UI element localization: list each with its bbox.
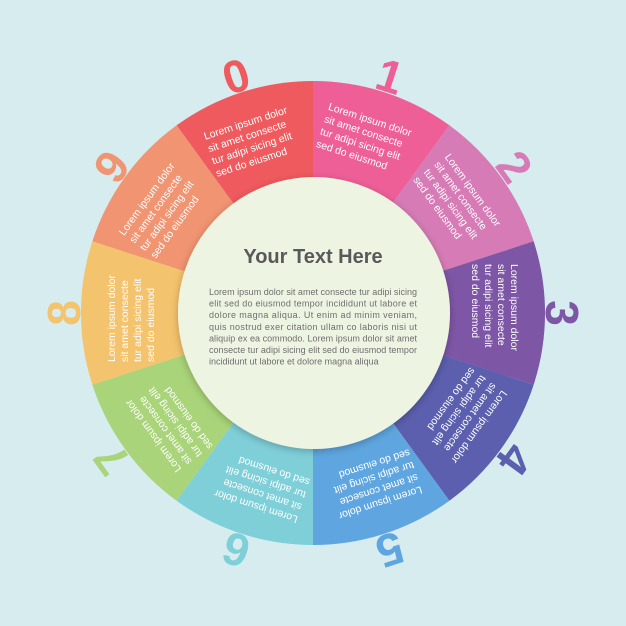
center paragraph: elit sed do eiusmod tempor incididunt ut labore et xyxy=(209,299,417,309)
segment texts: tur adipi sicing elit xyxy=(224,463,307,500)
segment texts: sit amet consecte xyxy=(431,159,489,233)
segment texts: sit amet consecte xyxy=(338,471,420,508)
center paragraph xyxy=(209,287,417,367)
segment texts: tur adipi sicing elit xyxy=(319,126,402,163)
segment texts: sed do eiusmod xyxy=(424,365,478,432)
segment texts: Lorem ipsum dolor xyxy=(508,264,520,351)
segment texts: sit amet consecte xyxy=(441,380,499,454)
center paragraph: quis nostrud exer citation ullam co laboris nisi ut xyxy=(209,322,417,332)
segment texts: sit amet consecte xyxy=(127,172,185,246)
segment texts: sit amet consecte xyxy=(222,476,303,513)
segment texts: sed do eiusmod xyxy=(214,145,289,180)
segment texts: tur adipi sicing elit xyxy=(146,384,205,459)
segment texts: sit amet consecte xyxy=(206,118,288,155)
number digits: 9 xyxy=(83,141,140,192)
number digits: 0 xyxy=(216,48,256,105)
segment texts: sed do eiusmod xyxy=(315,138,389,172)
segment texts: tur adipi sicing elit xyxy=(429,373,488,447)
segment texts: Lorem ipsum dolor xyxy=(106,275,118,362)
segment texts: sed do eiusmod xyxy=(410,175,464,242)
segment texts: sed do eiusmod xyxy=(237,454,311,488)
segment texts: Lorem ipsum dolor xyxy=(123,397,184,474)
segment texts: sit amet consecte xyxy=(119,280,131,362)
segment texts xyxy=(106,101,520,525)
segment texts: Lorem ipsum dolor xyxy=(117,160,178,238)
segment texts: tur adipi sicing elit xyxy=(210,130,294,167)
number digits: 4 xyxy=(486,434,543,485)
number digits xyxy=(38,48,588,578)
center title: Your Text Here xyxy=(243,246,383,268)
segment texts: tur adipi sicing elit xyxy=(332,459,416,496)
segment texts: sed do eiusmod xyxy=(469,264,481,338)
center paragraph: Lorem ipsum dolor sit amet consecte tur adipi sicing xyxy=(209,287,417,297)
segment texts: sed do eiusmod xyxy=(337,446,412,481)
center paragraph: aliquip ex ea commodo. Lorem ipsum dolor sit amet xyxy=(209,333,417,343)
segment texts: sed do eiusmod xyxy=(148,194,202,261)
number digits: 3 xyxy=(536,300,588,326)
number digits: 1 xyxy=(370,48,410,105)
number digits: 6 xyxy=(216,521,256,578)
center paragraph: dolore magna aliqua. Ut enim ad minim veniam, xyxy=(209,310,417,320)
segment texts: tur adipi sicing elit xyxy=(132,278,144,362)
number digits: 7 xyxy=(83,434,140,485)
number digits: 2 xyxy=(486,141,543,192)
segment texts: Lorem ipsum dolor xyxy=(337,483,424,522)
segment texts: sed do eiusmod xyxy=(145,288,157,362)
segment texts: Lorem ipsum dolor xyxy=(448,388,509,466)
segment texts: sit amet consecte xyxy=(495,264,507,346)
center circle xyxy=(178,177,450,449)
segment texts: tur adipi sicing elit xyxy=(138,179,197,253)
number digits: 5 xyxy=(370,521,410,578)
segment texts: Lorem ipsum dolor xyxy=(202,104,289,143)
segment texts: Lorem ipsum dolor xyxy=(442,152,503,229)
segment texts: sed do eiusmod xyxy=(162,384,216,451)
segment texts: tur adipi sicing elit xyxy=(421,167,480,242)
segment texts: Lorem ipsum dolor xyxy=(327,101,414,139)
segment texts: sit amet consecte xyxy=(323,113,404,150)
number digits: 8 xyxy=(38,300,90,326)
segment texts: sit amet consecte xyxy=(137,393,195,467)
center paragraph: consecte tur adipi sicing elit sed do eiusmod tempor xyxy=(209,345,417,355)
center paragraph: incididunt ut labore et dolore magna aliqua xyxy=(209,357,379,367)
segment texts: tur adipi sicing elit xyxy=(482,264,494,348)
segment texts: Lorem ipsum dolor xyxy=(212,487,299,525)
wheel segments xyxy=(50,45,576,581)
